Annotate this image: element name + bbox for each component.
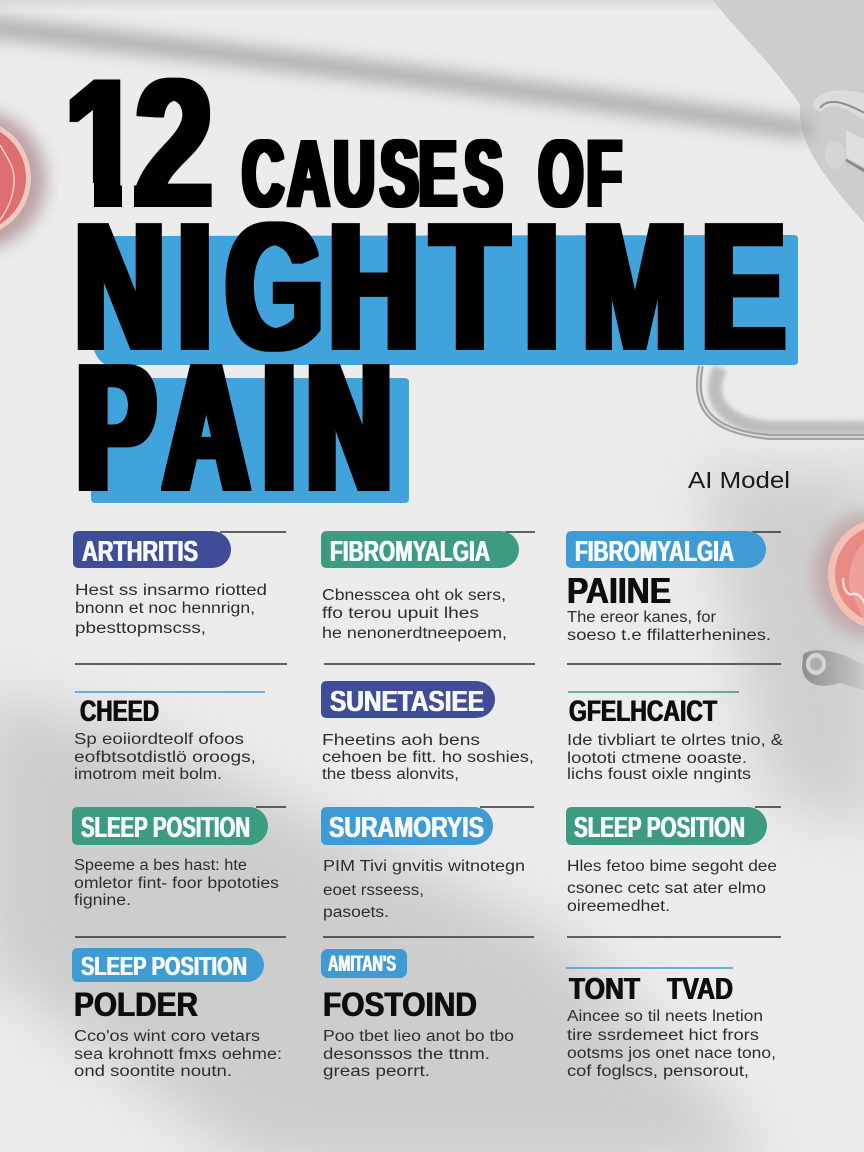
panel: arthritis: Hest ss insarmo riotted [75, 582, 267, 599]
title number 12: 12 [64, 43, 213, 245]
panel: suramoryis: PIM Tivi gnvitis witnotegn [323, 858, 525, 875]
panel: sleep position two: oireemedhet. [567, 898, 670, 915]
panel: polder [72, 948, 282, 1080]
panel: tont tvad: ootsms jos onet nace tono, [567, 1045, 776, 1062]
panel: sleep position one: omletor fint- foor bpototies [74, 875, 279, 892]
panel: polder: POLDER [74, 986, 198, 1024]
panel: fibromyalgia blue: FIBROMYALGIA [575, 536, 734, 568]
panel: fibromyalgia blue: The ereor kanes, for [567, 609, 716, 626]
panel: fostoind: AMITAN'S [328, 951, 396, 976]
panel: tont tvad: tire ssrdemeet hict frors [567, 1027, 759, 1044]
panel: arthritis [73, 531, 286, 637]
panel: cheed: CHEED [80, 695, 159, 728]
panel: tont tvad: TVAD [667, 971, 733, 1006]
panel: sleep position two: SLEEP POSITION [574, 812, 745, 844]
panel: fibromyalgia blue: PAIINE [567, 570, 671, 611]
panel: suramoryis: SURAMORYIS [329, 812, 484, 844]
panel: suramoryis [321, 807, 534, 921]
panel: sleep position two: csonec cetc sat ater elmo [567, 880, 766, 897]
panel: fibromyalgia green: he nenonerdtneepoem, [322, 625, 507, 642]
panel: gfelhcaict [567, 692, 784, 783]
panel: fostoind: FOSTOIND [323, 986, 477, 1024]
panel: suramoryis: eoet rsseess, [323, 882, 424, 899]
title line: nighttime: NIGHTIME [74, 185, 785, 387]
panel: fostoind: Poo tbet lieo anot bo tbo [323, 1028, 514, 1045]
panel: polder: ond soontite noutn. [74, 1063, 232, 1080]
panel: gfelhcaict: GFELHCAICT [569, 695, 717, 728]
panel: sunetasiee: cehoen be fitt. ho soshies, [322, 749, 534, 766]
panel: arthritis: bnonn et noc hennrign, [75, 600, 255, 617]
icon: stethoscope tip [802, 650, 864, 692]
panel: cheed: Sp eoiiordteolf ofoos [74, 731, 244, 748]
panel: gfelhcaict: lichs foust oixle nngints [567, 766, 751, 783]
panel: fibromyalgia blue [566, 531, 781, 644]
panel: cheed [74, 692, 265, 783]
panel: polder: sea krohnott fmxs oehme: [74, 1046, 282, 1063]
panel: tont tvad [566, 968, 776, 1080]
panel: suramoryis: pasoets. [323, 904, 389, 921]
panel: gfelhcaict: loototi ctmene ooaste. [567, 750, 747, 767]
panel: sleep position one: SLEEP POSITION [81, 812, 250, 844]
panel: fibromyalgia blue: soeso t.e ffilatterhenines. [567, 627, 771, 644]
panel: fostoind [321, 949, 514, 1080]
panel: gfelhcaict: Ide tivbliart te olrtes tnio, & [567, 732, 784, 749]
icon: right tissue cross-section [814, 509, 864, 641]
panel: sleep position one: Speeme a bes hast: hte [74, 857, 247, 874]
panel: arthritis: ARTHRITIS [82, 536, 198, 568]
title line: pain: PAIN [77, 328, 391, 529]
icon: stethoscope tube [699, 366, 864, 437]
panel: tont tvad: Aincee so til neets lnetion [567, 1008, 763, 1025]
title [0, 43, 798, 529]
panel: sleep position one: fignine. [74, 892, 131, 909]
panel: fibromyalgia green: FIBROMYALGIA [330, 536, 490, 568]
title line: causes of: CAUSES OF [0, 120, 622, 227]
highlight: nighttime bar [92, 235, 798, 365]
icon: safety pin top right [812, 90, 864, 174]
panel: polder: SLEEP POSITION [81, 951, 247, 981]
panel: sleep position two: Hles fetoo bime segoht dee [567, 858, 777, 875]
panel: fostoind: desonssos the ttnm. [323, 1046, 490, 1063]
panel: sunetasiee [321, 681, 534, 783]
icon: left tissue cross-section [0, 110, 46, 250]
panel: cheed: eofbtsotdistlö oroogs, [74, 749, 256, 766]
panel: fostoind: greas peorrt. [323, 1063, 430, 1080]
panel: sunetasiee: SUNETASIEE [330, 686, 484, 718]
credit label: AI Model [688, 467, 790, 493]
panel: arthritis: pbesttopmscss, [75, 620, 206, 637]
highlight: pain bar [91, 378, 409, 503]
panel: fibromyalgia green: Cbnesscea oht ok sers, [322, 587, 506, 604]
panel: fibromyalgia green [321, 531, 535, 642]
panel: polder: Cco'os wint coro vetars [74, 1028, 260, 1045]
panel: fibromyalgia green: ffo terou upuit lhes [322, 605, 479, 622]
panel: tont tvad: TONT [569, 971, 640, 1006]
panel: sleep position two [566, 807, 781, 915]
panel: sunetasiee: the tbess alonvits, [322, 766, 459, 783]
panel: tont tvad: cof foglscs, pensorout, [567, 1063, 749, 1080]
panel: sleep position one [72, 807, 286, 909]
panel: cheed: imotrom meit bolm. [74, 766, 222, 783]
panel: sunetasiee: Fheetins aoh bens [322, 732, 480, 749]
